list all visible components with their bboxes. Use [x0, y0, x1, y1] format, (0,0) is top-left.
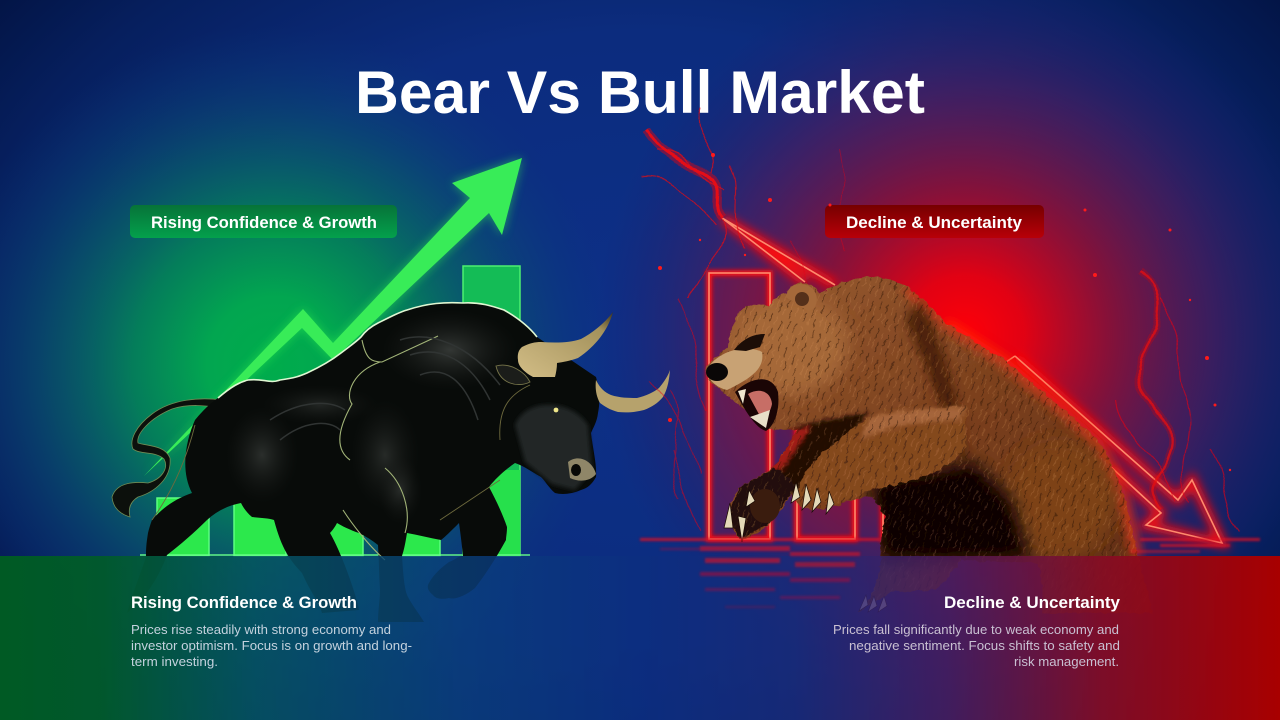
text block: bear	[833, 593, 1121, 669]
text block: bear: negative sentiment. Focus shifts to safety and	[849, 638, 1120, 653]
bear nose	[706, 363, 728, 381]
bear head tone	[732, 295, 848, 395]
bear back foot claws	[859, 595, 887, 612]
bull horns	[518, 312, 613, 377]
chart: red bars and falling arrow	[709, 218, 1222, 543]
bear arm	[795, 407, 966, 505]
illustration: bull	[112, 303, 670, 622]
text block: bull: Prices rise steadily with strong economy and	[131, 622, 391, 637]
bull ear	[496, 365, 530, 385]
bull tail	[112, 399, 222, 517]
bear belly shadow	[870, 462, 1030, 562]
bear back paw	[728, 468, 797, 540]
panel: bottom strip	[0, 556, 1280, 720]
bear fur texture	[709, 276, 1138, 556]
bear fur body	[706, 276, 1138, 614]
arrow: rising green	[144, 158, 522, 476]
text block: bear: Prices fall significantly due to weak economy and	[833, 622, 1119, 637]
decoration: red splatter	[658, 153, 1231, 471]
text block: bull: Rising Confidence & Growth	[131, 593, 357, 612]
bull rim light	[218, 303, 537, 398]
title: Bear Vs Bull Market	[355, 59, 925, 126]
bear rim light	[908, 287, 1138, 557]
bear hip	[1005, 442, 1115, 558]
text block: bull: term investing.	[131, 654, 218, 669]
bull eye	[554, 408, 558, 412]
bear ear	[787, 284, 817, 311]
badge: bull label	[130, 205, 397, 238]
text block: bull	[131, 593, 412, 669]
bull head	[515, 405, 592, 490]
bear claws	[724, 482, 834, 542]
badge: bull label: Rising Confidence & Growth	[151, 213, 377, 232]
bear muzzle	[706, 349, 762, 390]
bull muscles	[152, 310, 530, 560]
illustration: bear	[706, 276, 1148, 614]
bear mouth	[735, 379, 778, 431]
text block: bull: investor optimism. Focus is on growth and long-	[131, 638, 412, 653]
bear brow and eye	[734, 334, 765, 351]
decoration: red floor reflection	[640, 538, 1260, 608]
bear neck shadow	[905, 300, 968, 470]
bull muzzle	[568, 458, 596, 481]
text block: bear: Decline & Uncertainty	[944, 593, 1121, 612]
bull silhouette	[127, 303, 599, 622]
text block: bear: risk management.	[1014, 654, 1119, 669]
chart: green bars	[140, 266, 530, 556]
bear paw pad	[750, 489, 780, 523]
decoration: red smoke wisps	[640, 110, 1240, 530]
badge: bear label: Decline & Uncertainty	[846, 213, 1023, 232]
badge: bear label	[825, 205, 1044, 238]
